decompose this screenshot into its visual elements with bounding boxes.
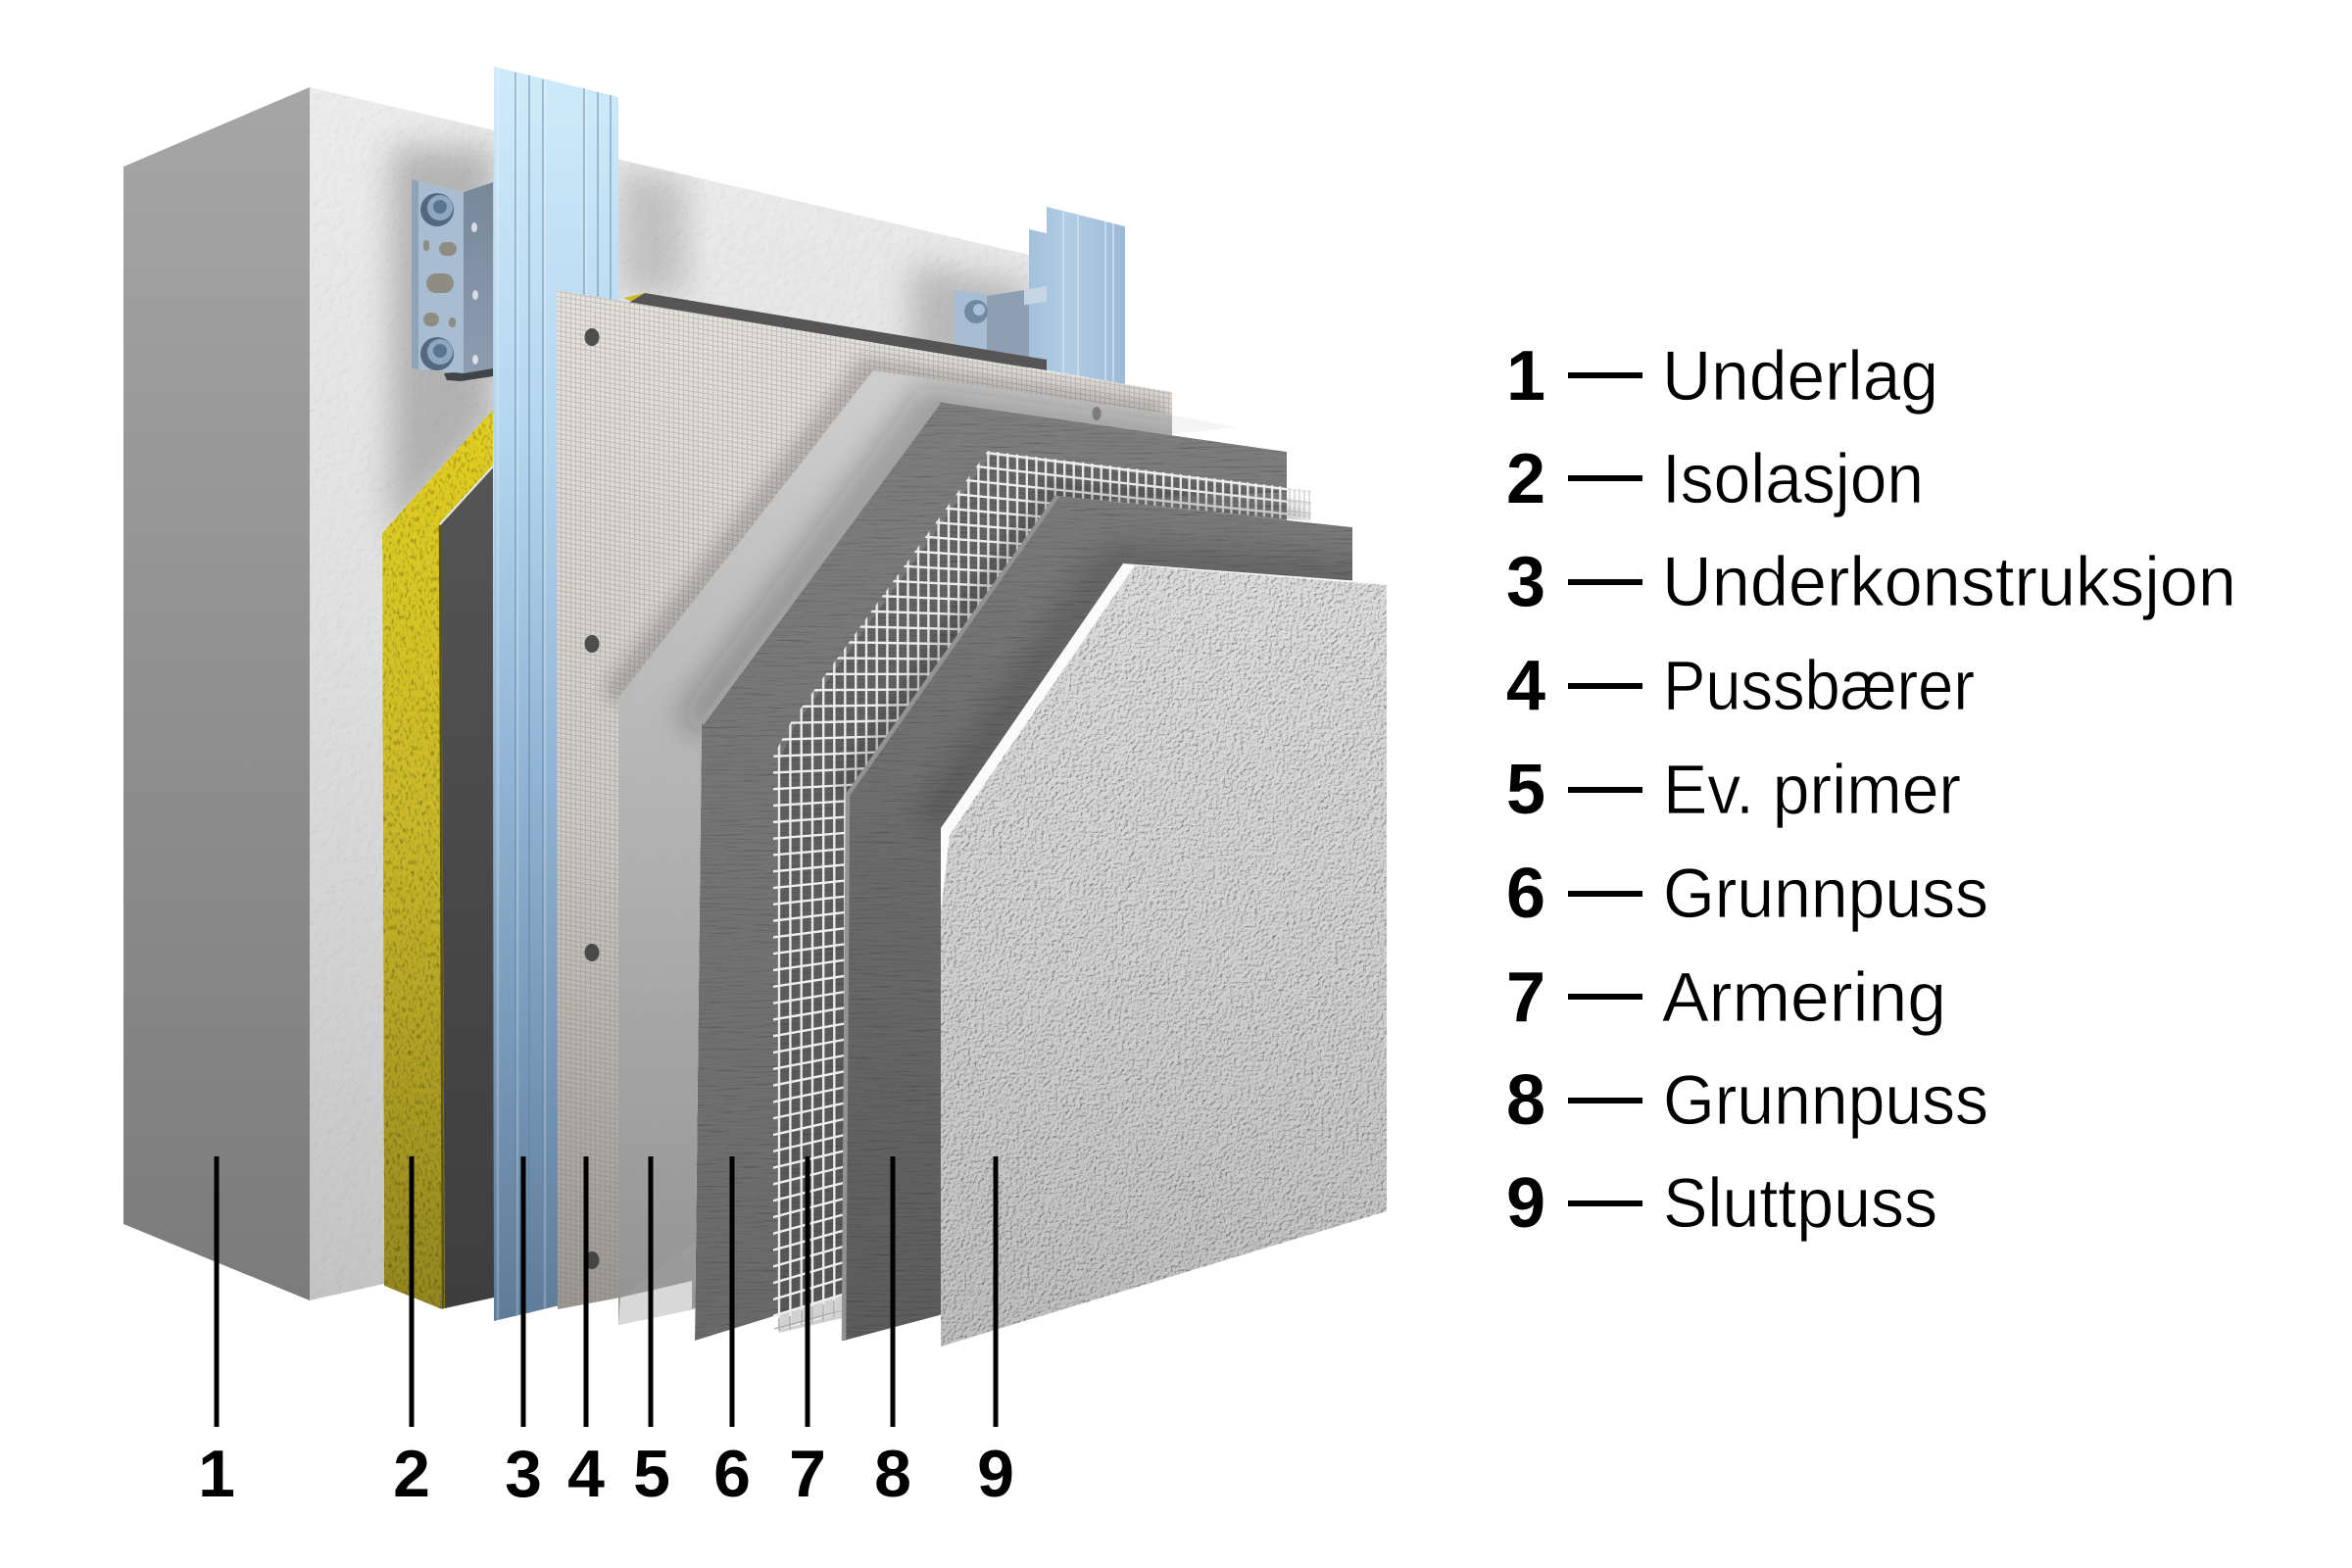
layer 1: substrate wall <box>123 87 1029 1300</box>
rail highlights <box>498 68 586 1320</box>
legend row 4 <box>1506 647 1975 725</box>
legend row 9: Sluttpuss <box>1663 1165 1937 1243</box>
lighter edge <box>844 496 1057 1341</box>
primer film <box>618 370 1172 1325</box>
lighter edge <box>702 402 939 723</box>
soft shadows on wall <box>392 147 1029 539</box>
legend row 9: 9 <box>1506 1164 1545 1243</box>
bracket flange <box>464 182 493 373</box>
legend row 7 <box>1506 958 1946 1037</box>
bracket plate <box>412 179 464 373</box>
wall left side face <box>123 87 310 1300</box>
legend row 2 <box>1506 440 1924 518</box>
dark seam between wool and facing <box>440 525 443 1308</box>
legend row 2: Isolasjon <box>1662 441 1924 518</box>
hole through primer <box>1092 407 1102 420</box>
leader 4: 4 <box>567 1437 605 1511</box>
leader 7: 7 <box>789 1437 826 1511</box>
bracket 2 flange <box>987 290 1029 359</box>
leader 8 <box>874 1156 911 1511</box>
legend row 3: Underkonstruksjon <box>1662 544 2236 621</box>
legend row 7: 7 <box>1506 958 1545 1037</box>
leader lines and numbers <box>198 1156 1014 1511</box>
rail body <box>494 67 618 1321</box>
base coat panel <box>695 402 1287 1341</box>
leader 5 <box>633 1156 670 1511</box>
clear primer foot <box>618 1281 692 1325</box>
legend row 4: 4 <box>1506 647 1545 725</box>
leader 1: 1 <box>198 1437 235 1511</box>
leader 3 <box>505 1156 542 1511</box>
horizontal threads <box>764 426 1313 1335</box>
legend row 6 <box>1506 855 1988 933</box>
layer 3: main vertical rail <box>494 67 618 1321</box>
legend row 4: Pussbærer <box>1663 648 1975 725</box>
leader 5: 5 <box>633 1437 670 1511</box>
layer 2: insulation <box>382 293 651 1309</box>
wall front face <box>310 87 1029 1300</box>
bracket 2 tab <box>1024 286 1047 305</box>
legend row 9 <box>1506 1164 1937 1243</box>
legend row 6: Grunnpuss <box>1663 856 1988 933</box>
legend row 6: 6 <box>1506 855 1545 933</box>
leader 1 <box>198 1156 235 1511</box>
woven texture <box>557 290 1172 1309</box>
faint primer extension to the right <box>1172 415 1237 434</box>
yellow mineral wool <box>382 410 493 1309</box>
textured plaster face <box>941 565 1387 1347</box>
layer 4: plaster carrier board <box>557 290 1172 1309</box>
dark facing of insulation <box>441 466 494 1308</box>
leader 6 <box>713 1156 751 1511</box>
mesh grid <box>764 426 1313 1343</box>
legend row 8: Grunnpuss <box>1663 1062 1988 1140</box>
layer 7: reinforcement mesh <box>764 426 1313 1343</box>
fastener 2 <box>584 635 600 653</box>
mesh overhang on white, bottom <box>774 1300 843 1331</box>
base coat panel <box>844 496 1352 1341</box>
bracket 2 plate <box>955 290 987 351</box>
legend row 2: 2 <box>1506 440 1545 518</box>
legend row 1: Underlag <box>1662 338 1938 416</box>
layer 3: bracket (left) <box>412 179 493 381</box>
leader 8: 8 <box>874 1437 911 1511</box>
mesh overhang on white, right <box>1287 488 1311 519</box>
vertical threads <box>779 431 1280 1343</box>
bracket foot <box>444 368 493 381</box>
legend row 1: 1 <box>1506 337 1545 416</box>
layer 3: second rail and bracket (right) <box>627 207 1125 384</box>
layer 9: finish plaster <box>941 564 1387 1347</box>
rail 2 ridges <box>1063 212 1113 382</box>
mesh shadow on base coat <box>779 456 1290 1333</box>
flange holes <box>471 222 478 365</box>
white bevel edge <box>941 564 1387 1347</box>
layer 6: base coat <box>695 402 1287 1341</box>
legend row 7: Armering <box>1662 959 1946 1037</box>
yellow insulation top edge behind board <box>623 293 651 304</box>
leader 9 <box>977 1156 1014 1511</box>
layer 5: primer <box>618 370 1237 1325</box>
legend row 1 <box>1506 337 1938 416</box>
leader 2 <box>393 1156 430 1511</box>
rail ridges <box>515 73 611 1316</box>
board <box>557 290 1172 1309</box>
legend row 5: Ev. primer <box>1663 752 1961 829</box>
fastener 4 <box>584 1251 600 1269</box>
dark strip (rear of insulation) <box>627 293 1047 370</box>
fastener 1 <box>584 328 600 346</box>
fastener 3 <box>584 944 600 961</box>
bracket 2 bolt <box>964 300 988 323</box>
plate fold <box>412 179 418 369</box>
leader 3: 3 <box>505 1437 542 1511</box>
legend row 8: 8 <box>1506 1061 1545 1140</box>
legend row 3: 3 <box>1506 543 1545 621</box>
white edge of facing <box>440 466 493 524</box>
leader 9: 9 <box>977 1437 1014 1511</box>
legend row 8 <box>1506 1061 1988 1140</box>
rail 2 <box>1029 207 1125 384</box>
bolt bottom <box>420 337 454 370</box>
layer 8: second base coat <box>844 496 1352 1341</box>
bolt top <box>420 193 454 226</box>
leader 7 <box>789 1156 826 1511</box>
legend row 5: 5 <box>1506 751 1545 829</box>
legend row 5 <box>1506 751 1961 829</box>
illustration: wall build-up with layers <box>123 67 1387 1347</box>
leader 6: 6 <box>713 1437 751 1511</box>
leader 2: 2 <box>393 1437 430 1511</box>
plate slots <box>423 240 457 327</box>
leader 4 <box>567 1156 605 1511</box>
legend <box>1506 337 2236 1243</box>
